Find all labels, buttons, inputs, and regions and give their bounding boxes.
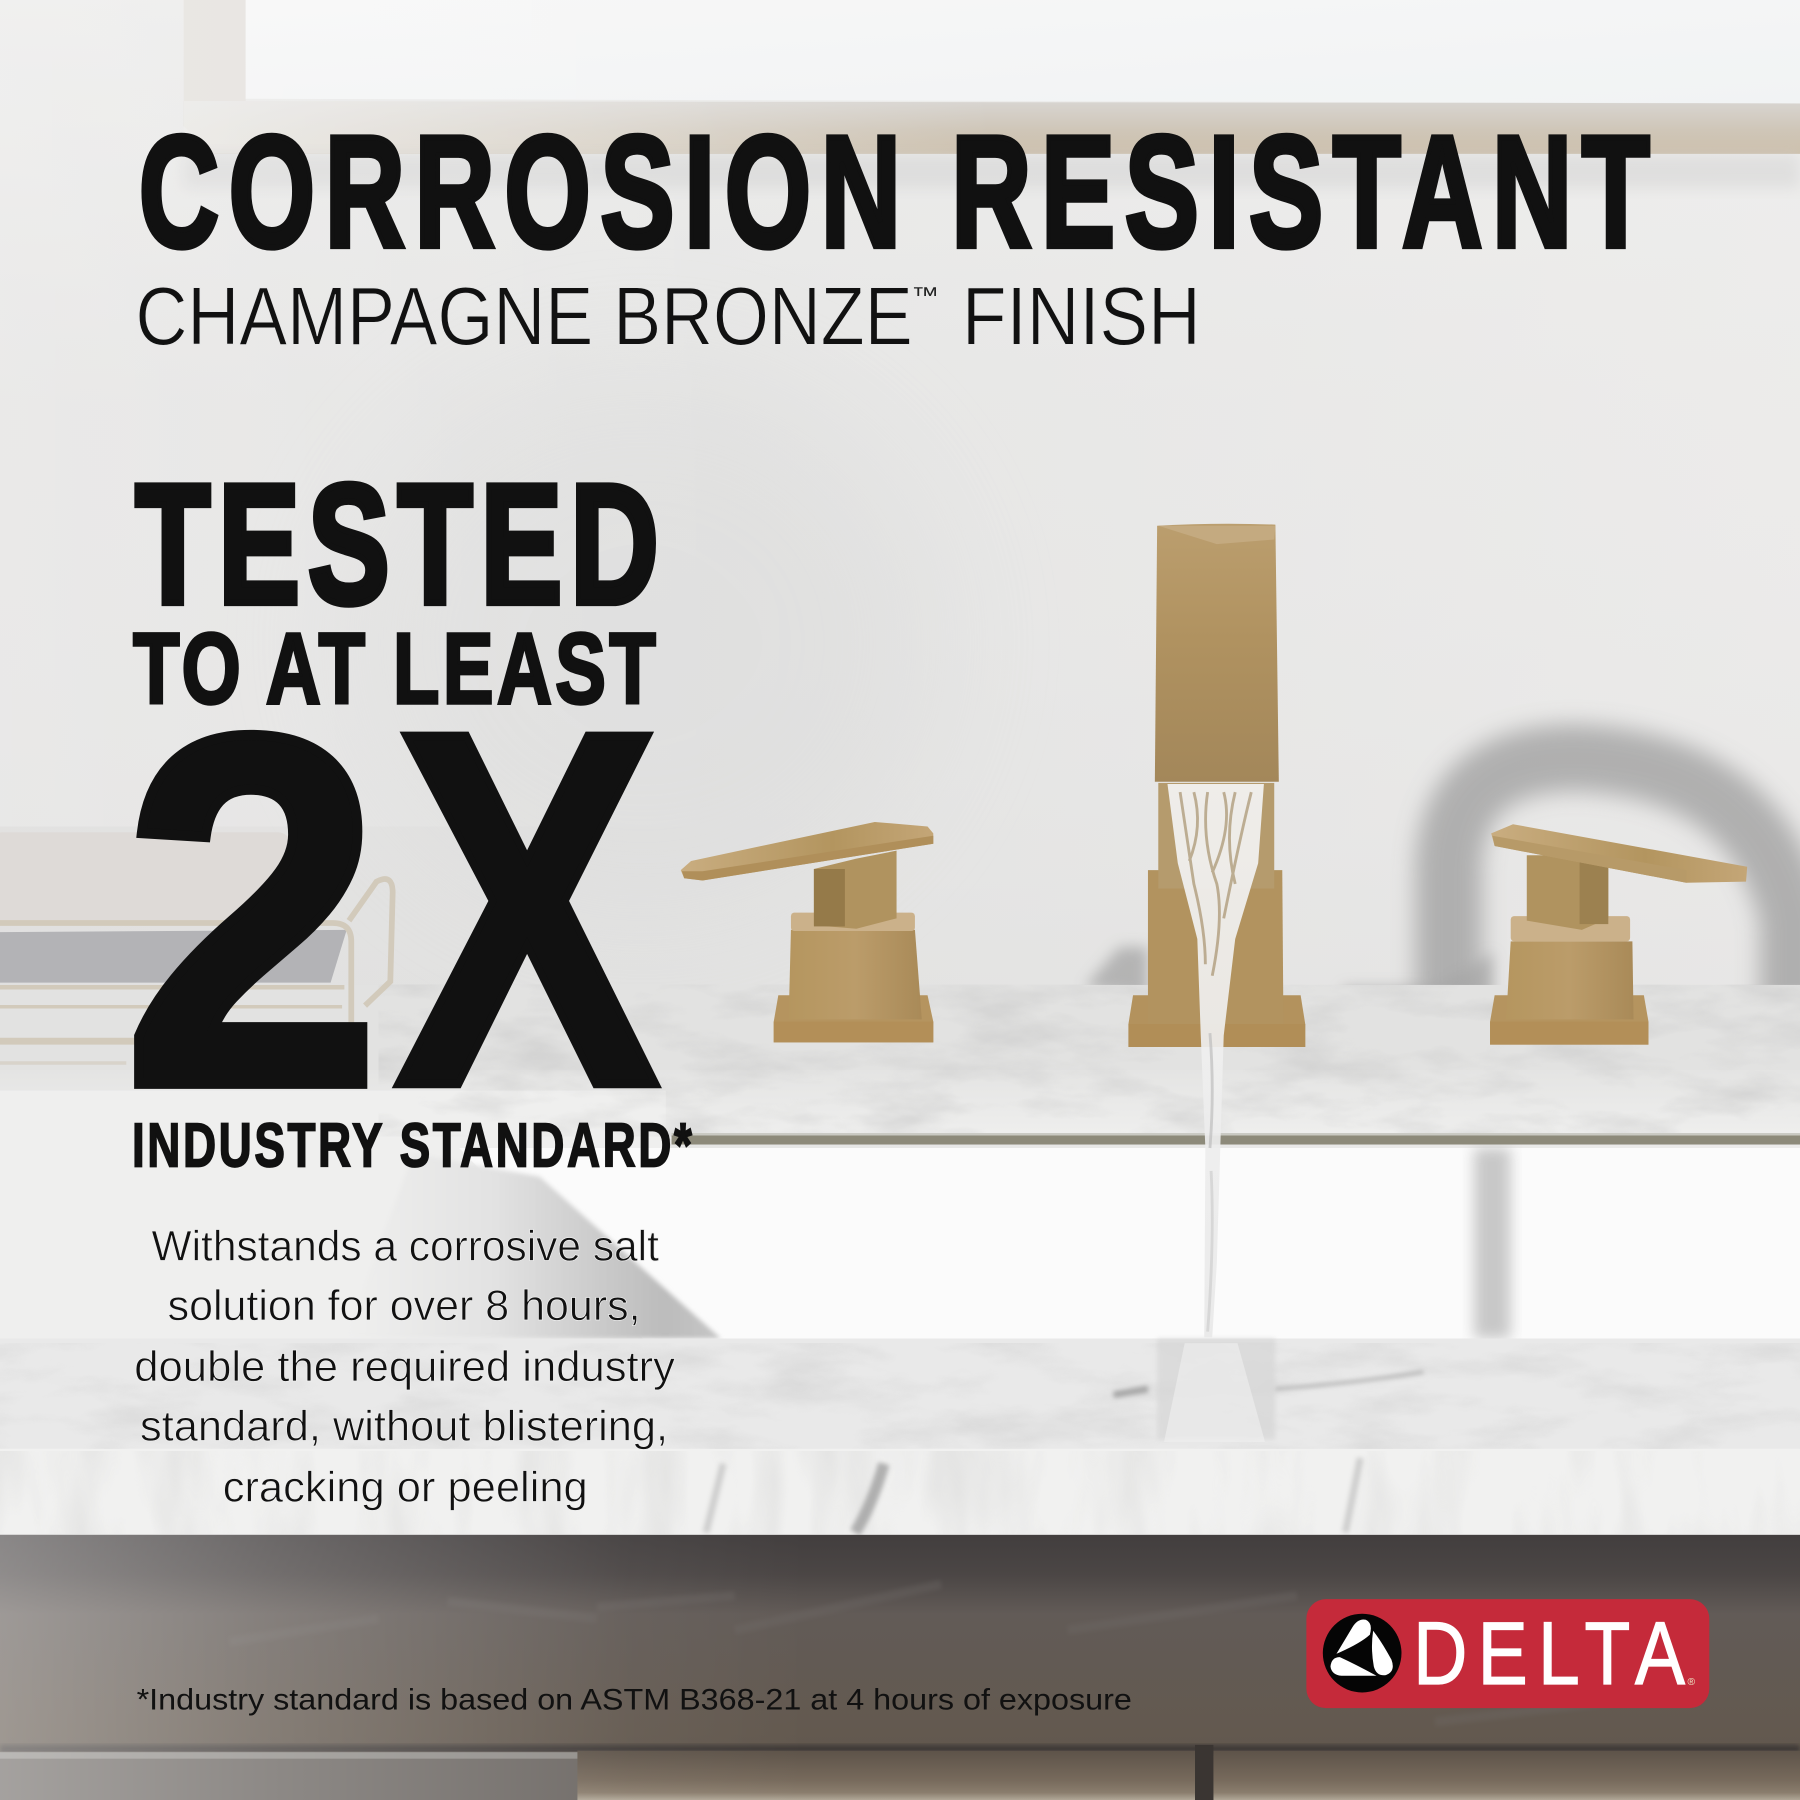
footnote: *Industry standard is based on ASTM B368-21 at 4 hours of exposure	[137, 1683, 1132, 1716]
body paragraph: standard, without blistering,	[140, 1403, 668, 1450]
subtitle: ™	[911, 282, 939, 308]
Delta logo	[1306, 1599, 1709, 1708]
body paragraph	[134, 1222, 676, 1511]
faucet: center spout and base	[1128, 524, 1305, 1047]
headline: tested: TESTED	[135, 450, 659, 639]
big stat: 2X: 2	[123, 632, 381, 1190]
subtitle: FINISH	[962, 269, 1201, 362]
big stat: 2X	[123, 628, 661, 1192]
body paragraph: cracking or peeling	[223, 1464, 588, 1511]
under-mount sink basin	[344, 1133, 1800, 1339]
faucet: left handle	[681, 822, 933, 1042]
wordmark: DELTA	[1413, 1603, 1685, 1704]
body paragraph: solution for over 8 hours,	[168, 1282, 641, 1329]
headline: to at least: TO AT LEAST	[133, 613, 656, 725]
marble front counter	[0, 1339, 1800, 1536]
background: bathroom wall	[0, 0, 1800, 1148]
wall shadows cast by faucet	[1085, 758, 1793, 1010]
soap dish with soap bar	[0, 832, 393, 1063]
water stream	[1164, 784, 1265, 1442]
subtitle: CHAMPAGNE BRONZE	[135, 269, 913, 362]
faucet: right handle	[1490, 824, 1747, 1045]
icon: Delta triangle mark	[1323, 1614, 1401, 1692]
Delta logo: ®	[1688, 1677, 1696, 1688]
fade over left of photo	[0, 0, 1800, 827]
dark wood vanity cabinet	[0, 1535, 1800, 1800]
marble vanity top	[0, 985, 1800, 1339]
body paragraph: double the required industry	[134, 1343, 676, 1390]
title: CORROSION RESISTANT	[139, 103, 1650, 280]
big stat: 2X: X	[395, 628, 661, 1192]
headline: industry standard: INDUSTRY STANDARD*	[132, 1111, 692, 1180]
mirror and beige frame	[184, 0, 1800, 188]
body paragraph: Withstands a corrosive salt	[152, 1222, 659, 1269]
